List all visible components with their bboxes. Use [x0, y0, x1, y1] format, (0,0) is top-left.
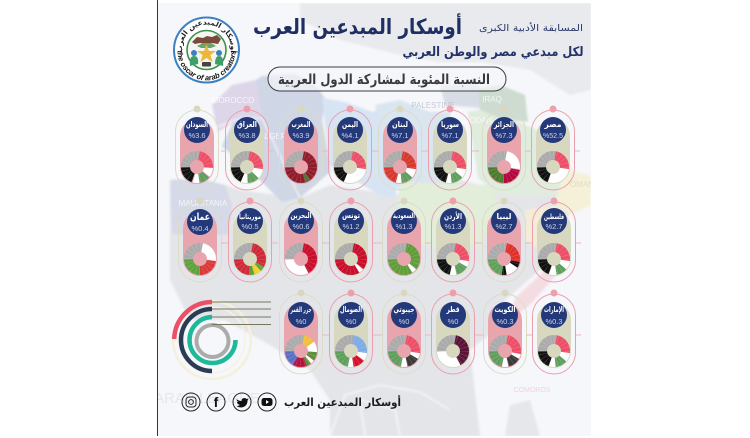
card: Jordan: %1.3 [444, 222, 462, 231]
card: Kuwait: الكويت [494, 305, 516, 314]
card: Kuwait: %0.3 [496, 317, 514, 326]
card: Morocco: المغرب [292, 120, 311, 129]
map labels [154, 95, 594, 407]
map labels: MAURITANIA [179, 199, 228, 208]
card: Qatar: %0 [448, 317, 458, 326]
card: Libya: %2.7 [495, 222, 513, 231]
card: Palestine: فلسطين [544, 213, 564, 221]
logo [173, 16, 240, 84]
card: Iraq: %3.8 [238, 131, 256, 140]
card: Comoros: %0 [296, 317, 306, 326]
map labels: MOROCCO [212, 96, 254, 105]
card: Palestine: %2.7 [545, 222, 563, 231]
logo: the oscar of arab creators [177, 50, 236, 80]
card: Syria [428, 106, 472, 190]
left border line [157, 0, 158, 436]
radial legend chart [173, 301, 271, 379]
card: Mauritania: %0.5 [241, 222, 259, 231]
heading pill [268, 67, 506, 91]
card: Egypt: %52.5 [543, 131, 563, 140]
card: Saudi Arabia: السعودية [393, 212, 415, 220]
title: أوسكار المبدعين العرب [253, 12, 462, 39]
card: Oman: عمان [190, 212, 210, 223]
card: Iraq: العراق [237, 120, 257, 129]
card: Oman: %0.4 [191, 224, 209, 233]
card: Tunisia: %1.2 [342, 222, 360, 231]
card: Saudi Arabia: %1.3 [395, 222, 413, 231]
card: Somalia [330, 290, 372, 374]
card: Morocco: %3.9 [292, 131, 310, 140]
card: Morocco [280, 106, 322, 190]
card: Tunisia: تونس [342, 211, 360, 221]
card: Lebanon [378, 106, 422, 190]
card: Egypt [532, 106, 574, 190]
card: Libya [482, 198, 526, 282]
background map [154, 3, 594, 436]
social icon: youtube [258, 393, 276, 411]
card: Djibouti: جيبوتي [394, 305, 415, 314]
infographic [157, 0, 591, 436]
heading pill: النسبة المئوية لمشاركة الدول العربية [278, 72, 490, 88]
social icon: instagram [182, 393, 200, 411]
connector ticks [221, 151, 581, 335]
panel background [157, 3, 591, 436]
footer brand name: أوسكار المبدعين العرب [284, 395, 401, 409]
map labels: COMOROS [514, 387, 551, 394]
social icon: twitter [233, 393, 251, 411]
card: Qatar: قطر [446, 305, 460, 314]
card: Kuwait [484, 290, 526, 374]
card: Sudan: السودان [186, 120, 208, 129]
card: Djibouti [382, 290, 426, 374]
card: Yemen: اليمن [342, 120, 358, 129]
map labels: IRAQ [482, 95, 502, 104]
card: Bahrain [280, 198, 322, 282]
card: Sudan: %3.6 [188, 131, 206, 140]
card: Yemen: %4.1 [341, 131, 359, 140]
card: Syria: سوريا [441, 120, 459, 129]
social icon: facebook: f [214, 394, 219, 410]
card: Jordan: الأردن [444, 211, 462, 221]
card: Djibouti: %0 [399, 317, 409, 326]
card: Oman [178, 198, 222, 282]
map labels: ARAB LEAGUE [154, 390, 260, 407]
card: UAE: %0.3 [545, 317, 563, 326]
map labels: OMAN [570, 180, 594, 189]
card: Iraq [226, 106, 268, 190]
card: Yemen [328, 106, 372, 190]
map labels: ALGER [259, 132, 287, 141]
social icon: facebook [207, 393, 225, 411]
card: Comoros: جزر القمر [290, 306, 312, 314]
card: Algeria: %7.3 [495, 131, 513, 140]
card: Egypt: مصر [544, 120, 562, 129]
card: Libya: ليبيا [496, 212, 512, 221]
card: Saudi Arabia [382, 198, 426, 282]
card: UAE [532, 290, 576, 374]
card: Palestine [532, 198, 576, 282]
subtitle: audience: لكل مبدعي مصر والوطن العربي [402, 45, 584, 60]
map labels: SODAN [464, 116, 492, 125]
card: Algeria: الجزائر [493, 120, 514, 129]
card: Jordan [432, 198, 474, 282]
logo: أوسكار المبدعين العرب [180, 22, 238, 53]
card: Comoros [280, 290, 322, 374]
card: Mauritania: موريتانيا [239, 213, 261, 221]
card: Tunisia [330, 198, 372, 282]
card: Lebanon: لبنان [392, 120, 408, 129]
map labels: PALESTINE [411, 101, 455, 110]
card: Mauritania [228, 198, 272, 282]
card: UAE: الإمارات [544, 305, 564, 314]
card: Qatar [432, 290, 474, 374]
card: Lebanon: %7.1 [391, 131, 409, 140]
card: Algeria [482, 106, 526, 190]
card: Sudan [176, 106, 218, 190]
subtitle: competition: المسابقة الأدبية الكبرى [479, 22, 583, 34]
card: Somalia: %0 [346, 317, 356, 326]
card: Bahrain: %0.6 [292, 222, 310, 231]
card: Syria: %7.1 [441, 131, 459, 140]
card: Bahrain: البحرين [290, 211, 312, 220]
card: Somalia: الصومال [340, 305, 362, 314]
